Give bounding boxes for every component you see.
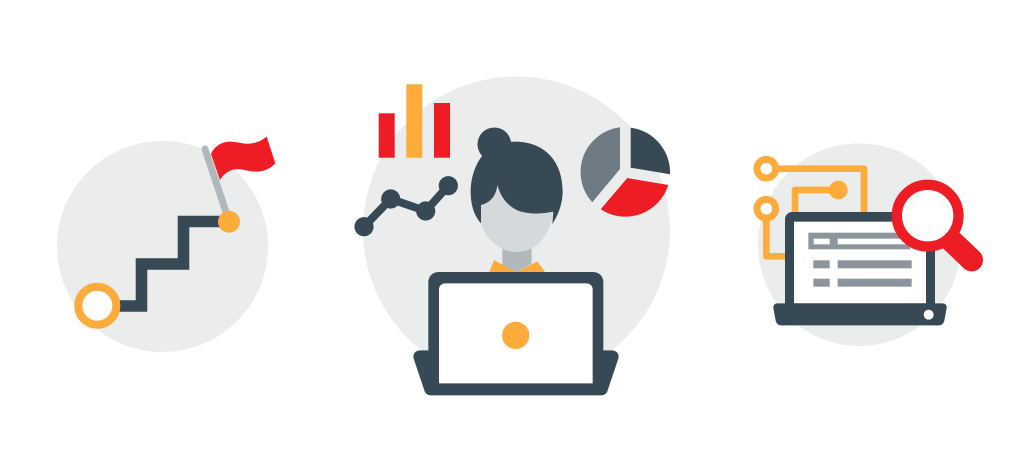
orange start ring <box>78 287 116 325</box>
hair <box>471 142 563 224</box>
background circle center <box>363 76 670 384</box>
hair bun <box>477 127 511 161</box>
orange end dot <box>218 211 240 233</box>
small laptop base <box>773 303 947 325</box>
background circle right <box>758 143 961 346</box>
screen list rows <box>808 233 912 287</box>
small laptop <box>773 212 947 325</box>
panel: goal staircase icon <box>57 137 275 352</box>
small laptop screen <box>794 222 926 303</box>
panel: laptop search icon <box>757 143 972 346</box>
staircase line <box>100 222 229 306</box>
circuit nodes <box>757 159 848 218</box>
magnifying glass <box>897 185 972 260</box>
base button <box>924 310 934 320</box>
orange screen dot <box>502 322 529 349</box>
pie chart <box>581 127 670 217</box>
person <box>471 127 563 272</box>
laptop screen <box>439 283 593 383</box>
panel: central analyst illustration <box>354 76 670 395</box>
laptop <box>413 272 619 395</box>
circuit lines <box>766 169 864 256</box>
neck <box>502 245 532 272</box>
bar chart <box>379 84 450 158</box>
face <box>481 180 553 252</box>
collar <box>489 260 545 272</box>
red flag <box>211 137 275 180</box>
small laptop frame <box>785 212 935 307</box>
line chart <box>354 176 458 236</box>
flag pole <box>205 149 229 221</box>
laptop body <box>413 272 619 395</box>
background circle left <box>57 141 268 352</box>
